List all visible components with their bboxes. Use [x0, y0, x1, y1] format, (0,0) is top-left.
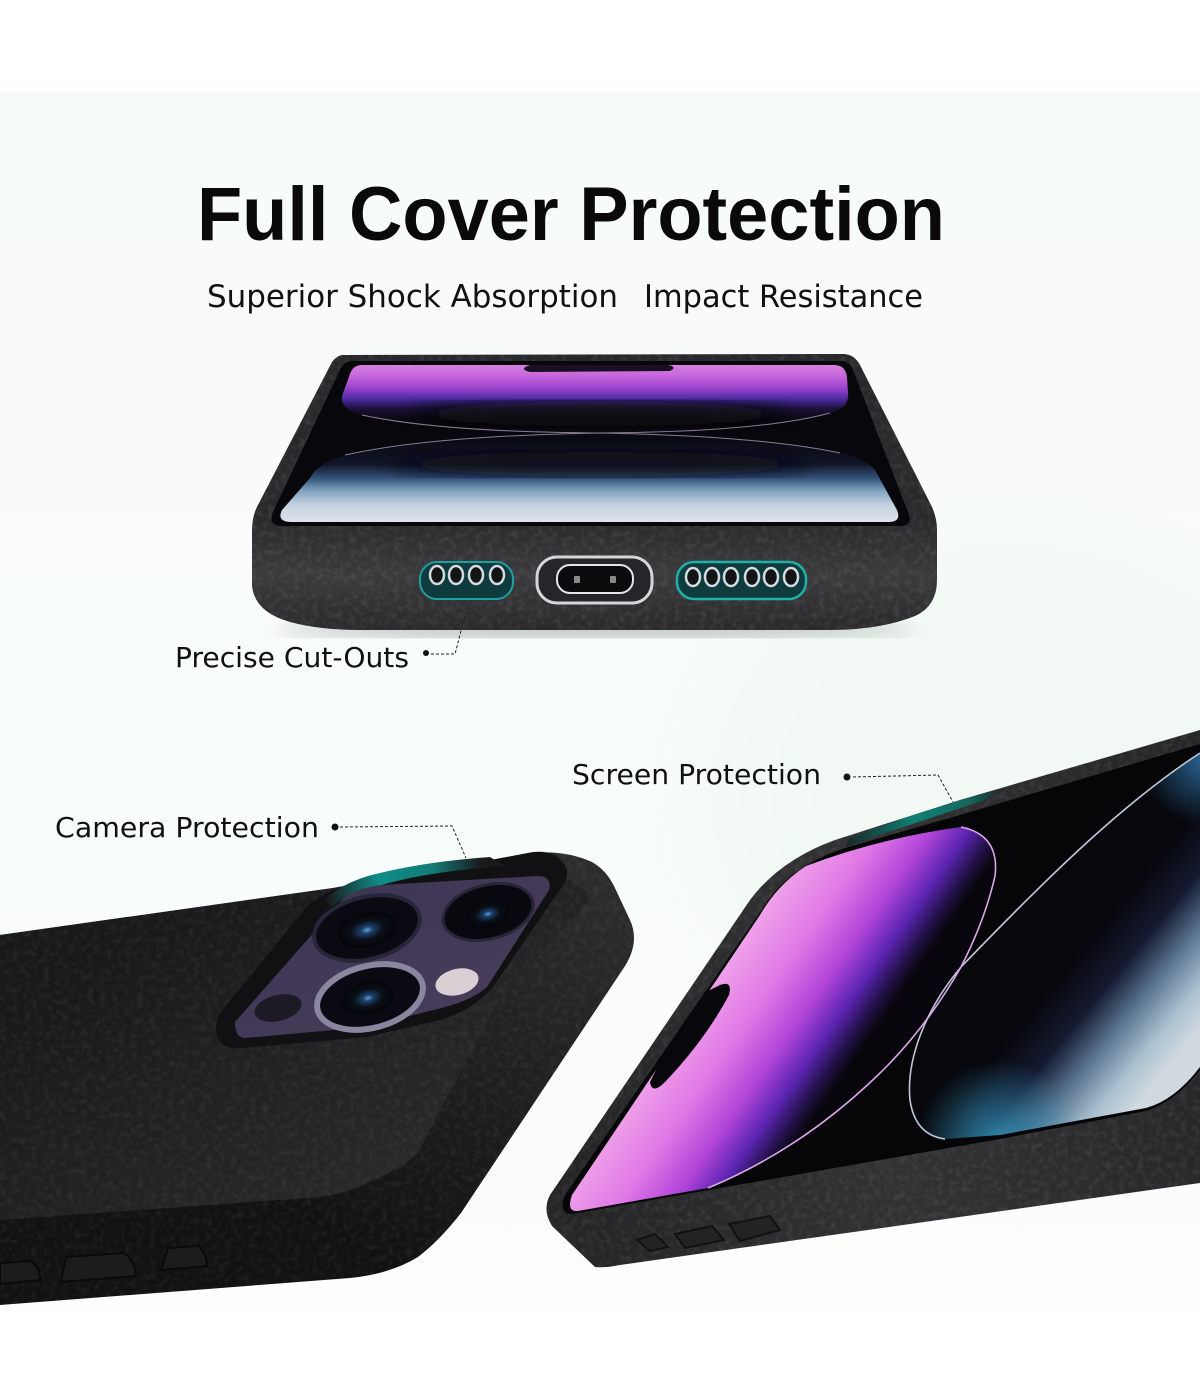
charging port: [537, 557, 652, 603]
teal rim highlight: [845, 790, 1000, 846]
subtitle: [207, 279, 923, 315]
phone: bottom view with cut-outs: [252, 354, 937, 637]
screen glass: [563, 744, 1200, 1214]
camera bump: [216, 852, 567, 1048]
dynamic island: [524, 365, 674, 372]
lens top-left: [307, 885, 427, 971]
screen wallpaper: [280, 365, 898, 522]
mic hole: [252, 990, 304, 1026]
subtitle: Superior Shock Absorption: [207, 279, 618, 315]
camera plate: [235, 876, 550, 1038]
side buttons: [0, 1246, 207, 1284]
lens top-right: [437, 875, 539, 949]
lens bottom: [310, 954, 430, 1040]
callout: precise cut-outs: [175, 604, 468, 674]
camera bump teal highlight: [326, 857, 505, 908]
subtitle: Impact Resistance: [644, 279, 923, 315]
callout: precise cut-outs: Precise Cut-Outs: [175, 641, 409, 674]
phone: front view with screen: [546, 730, 1200, 1267]
callout: camera protection: Camera Protection: [55, 811, 319, 844]
screen wallpaper: blue: [920, 754, 1200, 1139]
flash: [433, 964, 481, 1000]
speaker holes left: [420, 562, 513, 599]
screen wallpaper: purple: [570, 827, 996, 1211]
wallpaper arcs: [909, 753, 1200, 1139]
side buttons: [637, 1216, 780, 1251]
phone: back view with camera: [0, 852, 634, 1305]
speaker holes right: [677, 562, 806, 599]
callout: screen protection: Screen Protection: [572, 758, 821, 791]
screen arc lines: [345, 413, 840, 455]
title: Full Cover Protection: [197, 172, 945, 257]
callout: screen protection: [572, 758, 953, 802]
dynamic island: [650, 984, 730, 1088]
screen glass: [272, 361, 910, 526]
callout: camera protection: [55, 811, 466, 858]
